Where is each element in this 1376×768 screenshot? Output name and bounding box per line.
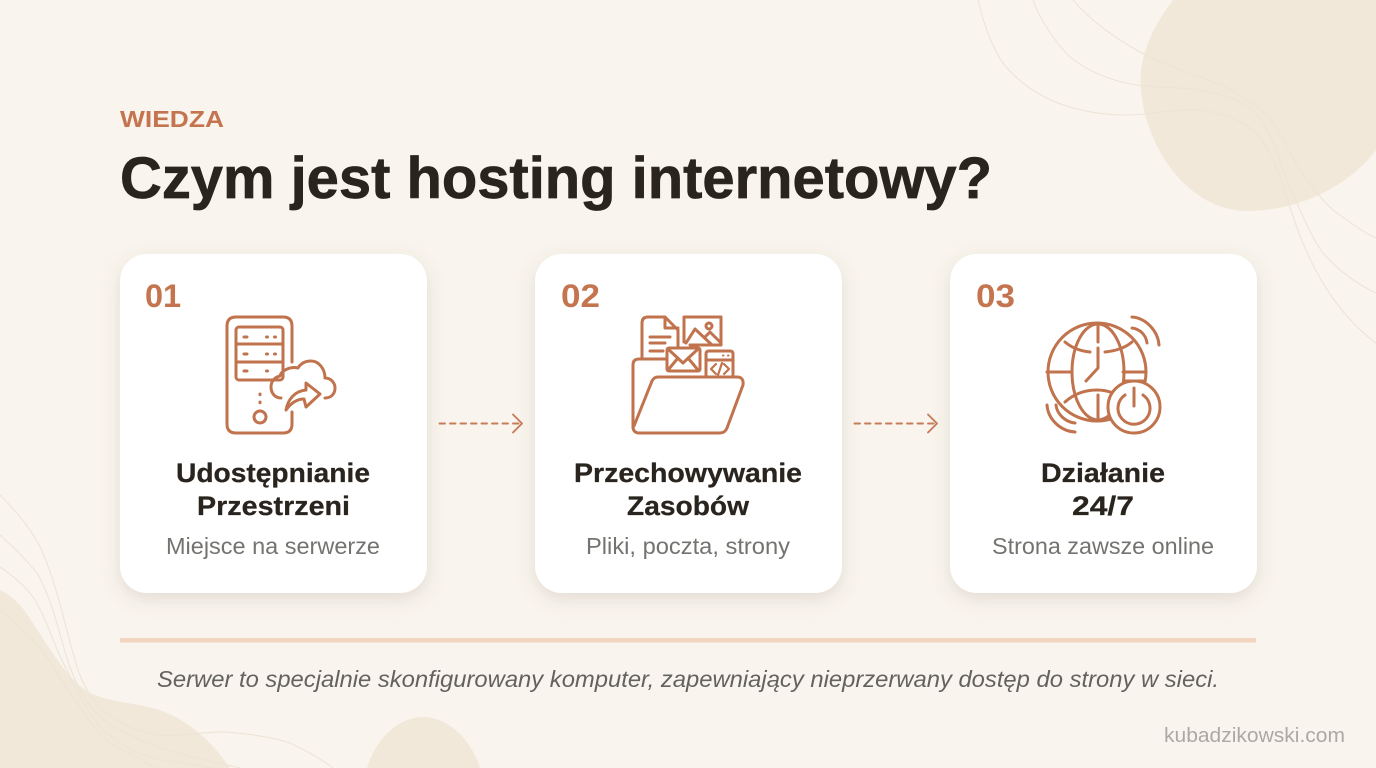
- decorative lines: bottom left: [0, 495, 333, 768]
- card 02 description: Pliki, poczta, strony: [586, 533, 791, 559]
- footnote: Serwer to specjalnie skonfigurowany komputer, zapewniający nieprzerwany dostęp do strony w sieci.: [157, 666, 1219, 692]
- card 03 description: Strona zawsze online: [992, 533, 1214, 559]
- card 03 heading: [1041, 458, 1165, 521]
- background blob: bottom left: [0, 590, 230, 768]
- number 01: 01: [145, 278, 181, 314]
- background blob: bottom centre: [367, 717, 480, 768]
- arrow: 01 to 02: [440, 414, 522, 432]
- card 02 heading: Zasobów: [627, 491, 750, 521]
- background blob: top right: [1141, 0, 1376, 211]
- card 02 heading: [574, 458, 802, 521]
- panel: card 01: [120, 254, 427, 593]
- icon: globe with clock and power: [1047, 317, 1160, 433]
- card 01 description: Miejsce na serwerze: [166, 533, 380, 559]
- card 01 heading: Przestrzeni: [197, 491, 350, 521]
- decorative lines: top right: [978, 0, 1376, 343]
- number 03: 03: [976, 278, 1015, 314]
- panel: card 02: [535, 254, 842, 593]
- card 01 heading: Udostępnianie: [176, 458, 370, 488]
- number 02: 02: [561, 278, 600, 314]
- icon: folder with files: [633, 317, 743, 433]
- website credit: kubadzikowski.com: [1164, 725, 1345, 747]
- title: Czym jest hosting internetowy?: [120, 146, 992, 211]
- panel: card 03: [950, 254, 1257, 593]
- eyebrow label: WIEDZA: [120, 106, 224, 132]
- card 02 heading: Przechowywanie: [574, 458, 802, 488]
- card 01 heading: [176, 458, 370, 521]
- icon: server with cloud: [227, 317, 335, 433]
- arrow: 02 to 03: [854, 414, 937, 432]
- card 03 heading: Działanie: [1041, 458, 1165, 488]
- card 03 heading: 24/7: [1072, 491, 1134, 521]
- divider: [120, 638, 1256, 642]
